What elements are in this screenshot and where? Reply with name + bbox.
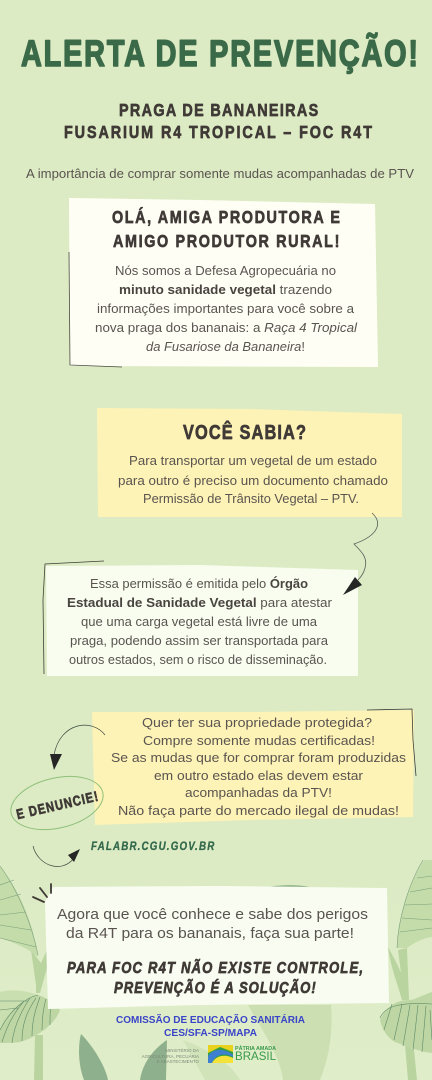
closing heading (67, 958, 363, 997)
mudas body (111, 715, 407, 818)
panel: mudas certificadas (92, 709, 416, 825)
callout: e denuncie (6, 768, 108, 838)
logo: ministério: MINISTÉRIO DA (165, 1047, 199, 1053)
greeting body: minuto sanidade vegetal trazendo (119, 282, 332, 297)
greeting body: nova praga dos bananais: a Raça 4 Tropical (95, 320, 358, 335)
você sabia body: Para transportar um vegetal de um estado (129, 453, 377, 468)
closing text: da R4T para os bananais, faça sua parte! (66, 926, 354, 942)
credit: commission: COMISSÃO DE EDUCAÇÃO SANITÁRIA (116, 1013, 305, 1026)
callout: e denuncie: E DENUNCIE! (15, 789, 99, 822)
mudas body: Não faça parte do mercado ilegal de mudas! (118, 803, 399, 818)
closing text (57, 907, 368, 942)
closing text: Agora que você conhece e sabe dos perigos (57, 907, 368, 923)
closing heading: PREVENÇÃO É A SOLUÇÃO! (114, 978, 316, 997)
credit: commission: CES/SFA-SP/MAPA (164, 1028, 257, 1039)
greeting heading (112, 206, 340, 251)
decorative plants: right (380, 860, 432, 1080)
panel: você sabia (97, 408, 402, 517)
você sabia body (118, 453, 388, 506)
panel: faça sua parte (33, 884, 389, 1009)
logo: ministério: AGRICULTURA, PECUÁRIA (142, 1053, 199, 1059)
logo: pátria amada brasil: PÁTRIA AMADA (235, 1045, 276, 1052)
greeting body (95, 263, 358, 354)
permissão body (67, 576, 333, 667)
mudas body: em outro estado elas devem estar (154, 768, 364, 783)
permissão body: praga, podendo assim ser transportada para (70, 633, 329, 648)
mudas body: Se as mudas que for comprar foram produzidas (111, 750, 407, 765)
link: falabr: FALABR.CGU.GOV.BR (91, 840, 215, 853)
panel: permissão (43, 561, 358, 676)
você sabia heading: VOCÊ SABIA? (183, 420, 306, 443)
permissão body: Essa permissão é emitida pelo Órgão (90, 576, 308, 591)
intro line: A importância de comprar somente mudas acompanhadas de PTV (26, 166, 414, 181)
greeting body: da Fusariose da Bananeira! (146, 339, 305, 354)
subtitle: FUSARIUM R4 TROPICAL – FOC R4T (64, 123, 372, 142)
permissão body: que uma carga vegetal está livre de uma (81, 614, 318, 629)
icon: spark marks (33, 884, 51, 902)
greeting heading: OLÁ, AMIGA PRODUTORA E (112, 206, 340, 227)
você sabia body: para outro é preciso um documento chamado (118, 473, 388, 488)
credit: commission (116, 1013, 305, 1039)
greeting body: Nós somos a Defesa Agropecuária no (115, 263, 336, 278)
panel: greeting (69, 198, 378, 367)
logo: ministério: E ABASTECIMENTO (157, 1059, 199, 1064)
mudas body: Compre somente mudas certificadas! (143, 733, 375, 748)
arrow: denuncie to link (33, 846, 80, 867)
greeting body: informações importantes para você sobre a (97, 301, 355, 316)
mudas body: Quer ter sua propriedade protegida? (142, 715, 372, 730)
decorative plants: centre (140, 885, 332, 1080)
subtitle: PRAGA DE BANANEIRAS (119, 101, 318, 120)
permissão body: Estadual de Sanidade Vegetal para atestar (67, 595, 333, 610)
subtitle (64, 101, 372, 142)
logo: pátria amada brasil (208, 1045, 276, 1063)
arrow: mudas to denuncie (50, 725, 105, 770)
logo: pátria amada brasil: BRASIL (235, 1049, 276, 1063)
mudas body: acompanhadas da PTV! (185, 785, 332, 800)
permissão body: outros estados, sem o risco de disseminação. (69, 652, 327, 667)
title: ALERTA DE PREVENÇÃO! (21, 33, 418, 75)
decorative plants: left (0, 866, 108, 1080)
logo: ministério (142, 1047, 199, 1064)
você sabia body: Permissão de Trânsito Vegetal – PTV. (143, 491, 359, 506)
closing heading: PARA FOC R4T NÃO EXISTE CONTROLE, (67, 958, 363, 977)
arrow: PTV to permissão (343, 513, 378, 595)
greeting heading: AMIGO PRODUTOR RURAL! (113, 232, 339, 251)
